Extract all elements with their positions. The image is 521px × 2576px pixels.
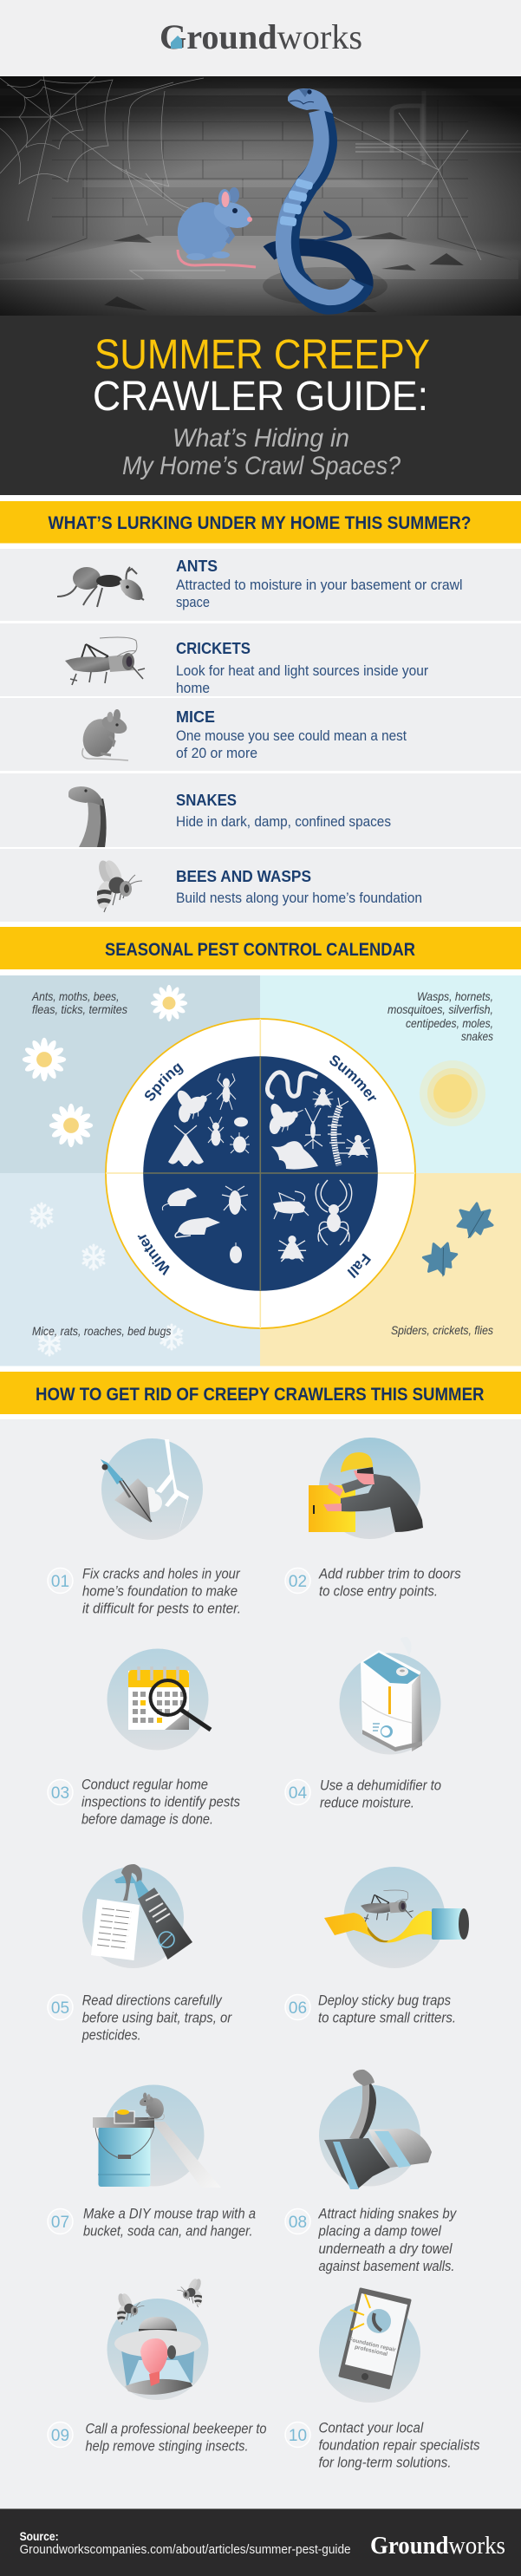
number 04 (285, 1779, 310, 1805)
text 02: to close entry points. (319, 1583, 438, 1599)
number 03: 03 (51, 1784, 69, 1803)
text 07 (83, 2206, 256, 2239)
panel: fall quadrant (260, 1173, 521, 1366)
number 06 (285, 1994, 310, 2020)
panel: seasonal pest calendar (0, 975, 521, 1366)
panel: fall quadrant: Spiders, crickets, flies (391, 1323, 493, 1337)
label: spring: Spring (145, 1063, 184, 1101)
text 01: Fix cracks and holes in your (82, 1566, 241, 1581)
text 08 (318, 2206, 458, 2274)
number 05: 05 (51, 1999, 69, 2018)
text 08: underneath a dry towel (319, 2240, 453, 2257)
step 09 (48, 2278, 267, 2454)
number 07 (48, 2209, 73, 2234)
step 03 (48, 1649, 240, 1828)
title line 1: SUMMER CREEPY (94, 332, 430, 378)
panel: winter quadrant (0, 1173, 260, 1366)
text: mice (176, 708, 407, 761)
list: bees and wasps (0, 849, 521, 922)
icon: beekeeper with bees (107, 2278, 208, 2400)
list: crickets (0, 623, 521, 696)
source text: Groundworkscompanies.com/about/articles/summer-pest-guide (20, 2542, 351, 2557)
number 02: 02 (289, 1573, 307, 1591)
summer pests (267, 1073, 370, 1170)
text 01 (82, 1566, 241, 1616)
text 04: Use a dehumidifier to (320, 1777, 441, 1793)
text 01: it difficult for pests to enter. (82, 1601, 241, 1616)
text 10: Contact your local (319, 2419, 424, 2436)
number 03 (48, 1779, 73, 1805)
number 04: 04 (289, 1784, 307, 1803)
panel: summer quadrant: centipedes, moles, (406, 1016, 493, 1030)
icon: calendar with magnifier (107, 1649, 211, 1750)
text 10: for long-term solutions. (319, 2454, 451, 2471)
icon: phone calling foundation repair professional (319, 2289, 420, 2403)
icon: DIY bucket mouse trap (93, 2084, 221, 2188)
footer (0, 2508, 521, 2576)
text: snakes: SNAKES (176, 792, 237, 809)
text 08: placing a damp towel (318, 2223, 442, 2239)
text 09: Call a professional beekeeper to (85, 2421, 267, 2436)
step 02 (285, 1438, 461, 1599)
header band with logo (0, 0, 521, 76)
text 04 (320, 1777, 441, 1810)
section header: what's lurking: WHAT’S LURKING UNDER MY HOME THIS SUMMER? (49, 513, 472, 533)
step 05 (48, 1864, 232, 2043)
text 02: Add rubber trim to doors (318, 1566, 461, 1581)
panel: winter quadrant: Mice, rats, roaches, bed bugs (32, 1324, 172, 1338)
panel: summer quadrant: snakes (461, 1029, 493, 1043)
text 07: Make a DIY mouse trap with a (83, 2206, 256, 2221)
subtitle line 1: What’s Hiding in (173, 424, 349, 453)
panel: how-to steps (0, 1419, 521, 2508)
text 01: home’s foundation to make (82, 1583, 238, 1599)
number 09 (48, 2423, 73, 2447)
snake (263, 88, 387, 305)
step 08 (285, 2070, 458, 2274)
number 05 (48, 1994, 73, 2020)
icon: phone calling foundation repair professional: professional (354, 2344, 388, 2358)
text: mice: MICE (176, 708, 215, 726)
step 01 (48, 1438, 241, 1616)
subtitle line 2: My Home’s Crawl Spaces? (122, 452, 401, 480)
icon: worker fitting door trim (309, 1438, 423, 1539)
mouse (171, 187, 256, 267)
text 10 (319, 2419, 480, 2471)
text 08: Attract hiding snakes by (318, 2206, 458, 2221)
text 09 (85, 2421, 267, 2454)
text: crickets (176, 640, 428, 696)
text 06: Deploy sticky bug traps (318, 1992, 451, 2008)
list: snakes (0, 773, 521, 847)
text 03: before damage is done. (81, 1810, 213, 1828)
number 08: 08 (289, 2214, 307, 2232)
text: snakes: Hide in dark, damp, confined spaces (176, 813, 391, 830)
text: snakes (176, 792, 391, 830)
text: ants: space (176, 594, 210, 610)
step 06 (285, 1867, 469, 2025)
text 10: foundation repair specialists (319, 2436, 480, 2454)
section header: seasonal calendar: SEASONAL PEST CONTROL CALENDAR (105, 940, 415, 960)
text 06 (318, 1992, 456, 2025)
text 02 (318, 1566, 461, 1599)
section header: what's lurking (0, 501, 521, 543)
number 01: 01 (51, 1573, 69, 1591)
number 08 (285, 2209, 310, 2234)
text: ants: ANTS (176, 558, 218, 575)
source text: Source: (20, 2529, 59, 2543)
panel: summer quadrant: Wasps, hornets, (417, 989, 493, 1003)
source text (20, 2529, 351, 2557)
text 05: pesticides. (81, 2027, 141, 2043)
icon: mouse (79, 709, 129, 760)
text: mice: of 20 or more (176, 745, 257, 761)
text: crickets: CRICKETS (176, 640, 251, 657)
text 05: Read directions carefully (82, 1992, 223, 2008)
panel: summer quadrant: mosquitoes, silverfish, (387, 1002, 493, 1016)
spring pests (168, 1073, 250, 1166)
footer logo: Groundworks (370, 2533, 505, 2560)
text 05: before using bait, traps, or (82, 2010, 232, 2025)
winter pests (162, 1186, 248, 1263)
title line 2: CRAWLER GUIDE: (93, 374, 428, 420)
text: ants (176, 558, 463, 610)
number 09: 09 (51, 2427, 69, 2445)
list: ants (0, 549, 521, 621)
label: summer: Summer (329, 1055, 376, 1101)
text 07: bucket, soda can, and hanger. (83, 2223, 253, 2239)
step 04 (285, 1637, 441, 1810)
number 07: 07 (51, 2214, 69, 2232)
icon: spray bottle and directions (82, 1864, 192, 1968)
section header: seasonal calendar (0, 927, 521, 969)
step 10 (285, 2289, 480, 2471)
icon: phone calling foundation repair professional: Foundation repair (348, 2337, 397, 2353)
number 02 (285, 1568, 310, 1594)
icon: bee (94, 858, 142, 912)
text 08: against basement walls. (319, 2258, 454, 2274)
icon: trowel on cracked wall (101, 1438, 203, 1540)
number 01 (48, 1568, 73, 1594)
number 10: 10 (289, 2427, 307, 2445)
icon: snake under towels (319, 2070, 432, 2189)
text: bees and wasps (176, 868, 422, 906)
text: ants: Attracted to moisture in your basement or crawl (176, 577, 463, 593)
spider webs (0, 76, 481, 260)
panel: spring quadrant: fleas, ticks, termites (32, 1002, 127, 1016)
section header: how to get rid (0, 1372, 521, 1414)
text 03 (81, 1776, 240, 1828)
title block (0, 316, 521, 495)
text: bees and wasps: Build nests along your home’s foundation (176, 890, 422, 906)
label: winter: Winter (137, 1235, 170, 1276)
panel: summer quadrant (260, 975, 521, 1173)
number 06: 06 (289, 1999, 307, 2018)
text 09: help remove stinging insects. (85, 2438, 248, 2454)
hero illustration: crawl space with mouse and snake (0, 76, 521, 316)
icon: sticky bug trap (324, 1867, 469, 1968)
label: fall: Fall (347, 1254, 371, 1278)
panel: spring quadrant (0, 975, 260, 1173)
fall pests (273, 1180, 352, 1262)
icon: snake (68, 786, 107, 847)
text 06: to capture small critters. (318, 2010, 456, 2025)
list: mice (0, 698, 521, 771)
text 05 (81, 1992, 232, 2043)
text: crickets: home (176, 680, 210, 696)
text 04: reduce moisture. (320, 1795, 414, 1810)
chart: season wheel (105, 1018, 416, 1329)
text: crickets: Look for heat and light sources inside your (176, 662, 428, 679)
step 07 (48, 2084, 256, 2239)
logo: Groundworks: Groundworks (160, 17, 362, 56)
text 03: inspections to identify pests (81, 1793, 240, 1810)
text 03: Conduct regular home (81, 1776, 208, 1793)
icon: cricket (65, 637, 145, 685)
text: mice: One mouse you see could mean a nest (176, 727, 407, 744)
icon: dehumidifier (340, 1637, 440, 1755)
number 10 (285, 2423, 310, 2447)
icon: ant (57, 567, 144, 607)
panel: spring quadrant: Ants, moths, bees, (31, 989, 120, 1003)
text: bees and wasps: BEES AND WASPS (176, 868, 311, 885)
